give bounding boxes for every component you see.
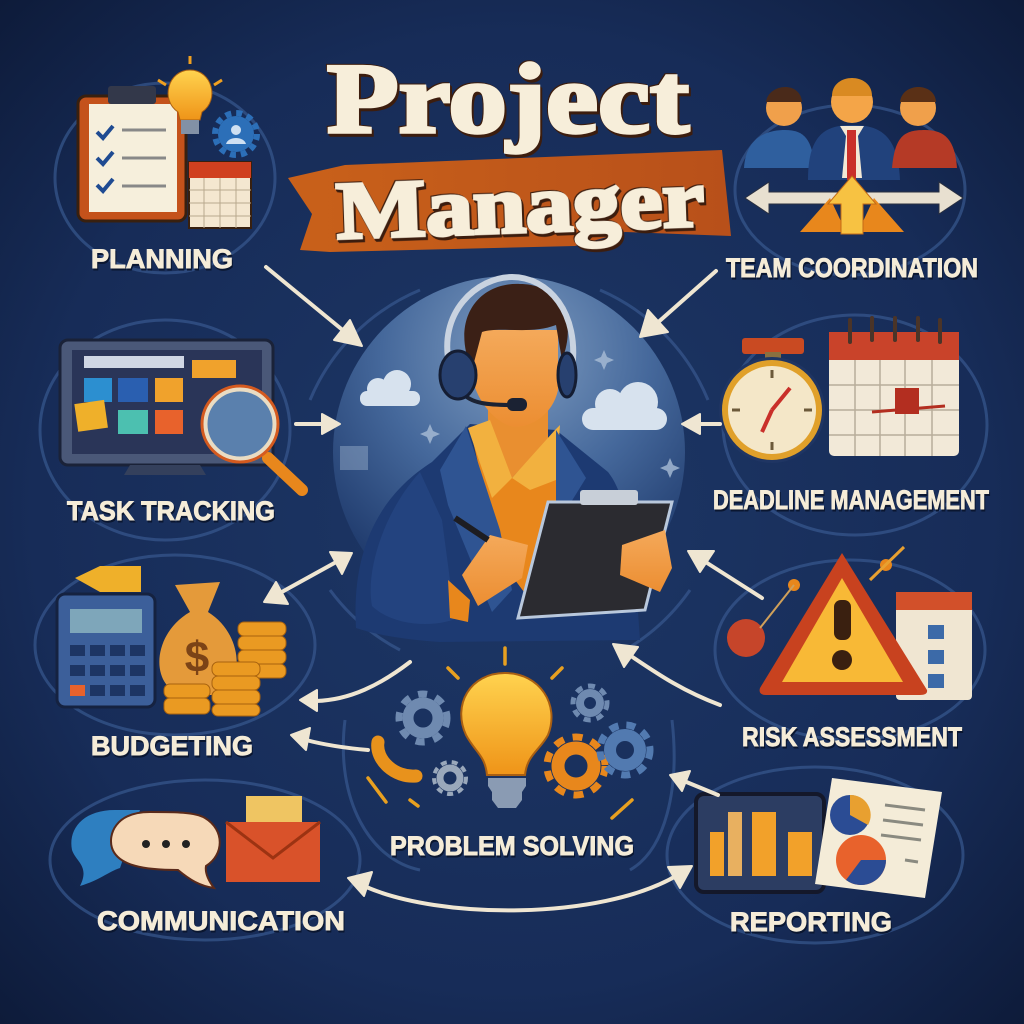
face bbox=[470, 330, 558, 427]
title bbox=[288, 43, 731, 256]
bar chart bbox=[696, 794, 824, 892]
task tracking label: TASK TRACKING bbox=[67, 496, 275, 526]
communication icon bbox=[71, 796, 320, 888]
bulb bbox=[461, 673, 551, 775]
budgeting icon bbox=[57, 566, 286, 716]
sky sparkles bbox=[340, 350, 680, 478]
clipboard bbox=[78, 96, 186, 221]
stopwatch bbox=[742, 338, 804, 354]
arrows and triangle bbox=[745, 182, 963, 214]
problem solving icon bbox=[368, 648, 650, 818]
clipboard bbox=[518, 502, 672, 618]
task tracking icon bbox=[60, 340, 302, 490]
title word: Manager: Manager bbox=[335, 153, 706, 256]
arrows bbox=[264, 267, 762, 910]
reporting icon bbox=[696, 778, 942, 898]
hands bbox=[462, 535, 528, 606]
central figure bbox=[333, 276, 685, 642]
checklist bbox=[896, 592, 972, 700]
people bbox=[744, 130, 815, 168]
team icon bbox=[744, 78, 963, 234]
gear badge bbox=[215, 113, 257, 155]
arrow: risk bbox=[688, 551, 762, 598]
decorative rings bbox=[35, 83, 987, 943]
arrow: deadline bbox=[682, 414, 720, 434]
planning icon bbox=[78, 56, 257, 228]
arrow: budgeting bbox=[264, 552, 352, 604]
pen bbox=[455, 518, 488, 540]
arrow: reporting bbox=[670, 771, 718, 795]
calculator bbox=[57, 594, 155, 707]
phone bbox=[378, 742, 416, 776]
report page bbox=[815, 778, 942, 898]
calendar bbox=[189, 162, 251, 228]
title word: Project: Project bbox=[327, 43, 689, 154]
lapels bbox=[440, 426, 586, 612]
risk label: RISK ASSESSMENT bbox=[742, 722, 962, 752]
warning triangle bbox=[760, 553, 927, 695]
money bag bbox=[159, 582, 237, 695]
magnifier bbox=[268, 458, 302, 490]
envelope bbox=[246, 796, 302, 836]
left cuff bbox=[448, 580, 470, 622]
shirt bbox=[470, 428, 558, 600]
arrow: planning bbox=[266, 267, 362, 346]
budgeting label: BUDGETING bbox=[91, 731, 253, 761]
blue bubble bbox=[71, 810, 140, 886]
reporting label: REPORTING bbox=[730, 907, 892, 937]
calendar bbox=[829, 332, 959, 456]
arrow: team bbox=[640, 271, 716, 337]
network dots bbox=[727, 619, 765, 657]
team label: TEAM COORDINATION bbox=[726, 253, 978, 283]
problem solving label: PROBLEM SOLVING bbox=[390, 831, 634, 861]
monitor bbox=[60, 340, 273, 465]
jacket bbox=[356, 424, 640, 642]
communication label: COMMUNICATION bbox=[97, 906, 345, 936]
risk icon bbox=[727, 547, 972, 700]
banner bbox=[288, 150, 731, 252]
coins bbox=[164, 622, 286, 716]
globe bbox=[333, 276, 685, 628]
headset bbox=[440, 277, 576, 411]
budgeting icon: $ bbox=[185, 633, 209, 682]
light bulb bbox=[158, 56, 222, 134]
arrow: communication to reporting bbox=[348, 866, 692, 910]
arrow: problem to budget bbox=[291, 728, 368, 750]
clouds bbox=[360, 370, 667, 430]
arrow: center to budget bbox=[300, 662, 410, 711]
cream bubble bbox=[111, 812, 220, 888]
hair bbox=[464, 284, 568, 370]
arrow: problem to risk bbox=[613, 644, 720, 705]
tag bbox=[75, 566, 141, 592]
gears bbox=[399, 686, 650, 795]
neck bbox=[488, 395, 548, 480]
planning label: PLANNING bbox=[91, 244, 233, 274]
left sleeve bbox=[371, 472, 462, 624]
deadline icon bbox=[719, 318, 959, 463]
idea rays bbox=[368, 648, 632, 818]
arrow: tracking bbox=[296, 414, 340, 434]
